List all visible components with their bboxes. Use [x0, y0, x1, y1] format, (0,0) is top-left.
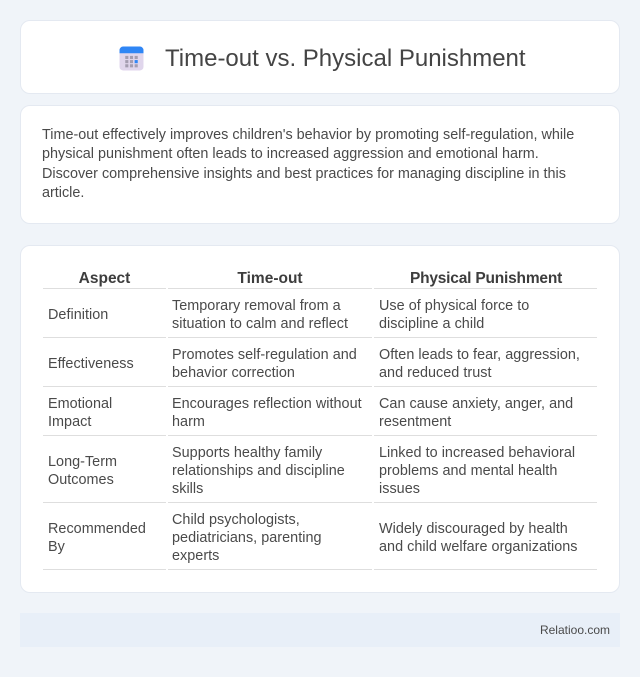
- intro text: Discover comprehensive insights and best practices for managing discipline in this: [42, 166, 566, 182]
- Time-out emotional impact: Encourages reflection without: [172, 396, 362, 412]
- Time-out effectiveness: Promotes self-regulation and: [172, 347, 357, 363]
- Time-out recommended by: [172, 512, 322, 564]
- row: Emotional Impact: [48, 396, 112, 430]
- intro panel: [20, 105, 620, 224]
- Physical Punishment definition: discipline a child: [379, 316, 484, 332]
- icon: calendar: [120, 46, 144, 70]
- intro text: physical punishment often leads to increased aggression and emotional harm.: [42, 146, 539, 162]
- intro text: [42, 127, 574, 201]
- title: Time-out vs. Physical Punishment: [165, 45, 526, 72]
- Time-out long-term outcomes: [172, 445, 345, 497]
- Physical Punishment emotional impact: [379, 396, 573, 430]
- Time-out effectiveness: behavior correction: [172, 365, 295, 381]
- Physical Punishment recommended by: and child welfare organizations: [379, 539, 578, 555]
- footer brand: Relatioo.com: [540, 623, 610, 637]
- row: Emotional Impact: Emotional: [48, 396, 112, 412]
- Time-out effectiveness: [172, 347, 357, 381]
- table panel: [20, 245, 620, 593]
- Time-out definition: situation to calm and reflect: [172, 316, 348, 332]
- Time-out long-term outcomes: skills: [172, 481, 203, 497]
- row: Long-Term Outcomes: Outcomes: [48, 472, 114, 488]
- Physical Punishment long-term outcomes: [379, 445, 575, 497]
- Physical Punishment definition: [379, 298, 529, 332]
- row: Long-Term Outcomes: [48, 454, 117, 488]
- Physical Punishment recommended by: [379, 521, 578, 555]
- Physical Punishment recommended by: Widely discouraged by health: [379, 521, 568, 537]
- Physical Punishment definition: Use of physical force to: [379, 298, 529, 314]
- row: Definition: Definition: [48, 307, 108, 323]
- table header: Time-out: Time-out: [237, 270, 303, 287]
- Time-out definition: [172, 298, 348, 332]
- Physical Punishment long-term outcomes: issues: [379, 481, 420, 497]
- header panel: [20, 20, 620, 94]
- Time-out emotional impact: [172, 396, 362, 430]
- row: Recommended By: Recommended: [48, 521, 146, 537]
- Time-out recommended by: experts: [172, 548, 219, 564]
- table header: Physical Punishment: Physical Punishment: [410, 270, 562, 287]
- row: Long-Term Outcomes: Long-Term: [48, 454, 117, 470]
- Physical Punishment effectiveness: Often leads to fear, aggression,: [379, 347, 580, 363]
- row: Emotional Impact: Impact: [48, 414, 91, 430]
- footer bar: [20, 613, 620, 647]
- Time-out long-term outcomes: relationships and discipline: [172, 463, 345, 479]
- Physical Punishment effectiveness: and reduced trust: [379, 365, 492, 381]
- row: Effectiveness: Effectiveness: [48, 356, 134, 372]
- row: Recommended By: By: [48, 539, 65, 555]
- row: Recommended By: [48, 521, 146, 555]
- Physical Punishment long-term outcomes: Linked to increased behavioral: [379, 445, 575, 461]
- Time-out emotional impact: harm: [172, 414, 205, 430]
- Physical Punishment emotional impact: Can cause anxiety, anger, and: [379, 396, 573, 412]
- Time-out long-term outcomes: Supports healthy family: [172, 445, 322, 461]
- Time-out definition: Temporary removal from a: [172, 298, 341, 314]
- Time-out recommended by: pediatricians, parenting: [172, 530, 322, 546]
- table header: Aspect: Aspect: [79, 270, 130, 287]
- intro text: article.: [42, 185, 84, 201]
- intro text: Time-out effectively improves children's behavior by promoting self-regulation, while: [42, 127, 574, 143]
- Physical Punishment long-term outcomes: problems and mental health: [379, 463, 557, 479]
- Physical Punishment emotional impact: resentment: [379, 414, 451, 430]
- Time-out recommended by: Child psychologists,: [172, 512, 300, 528]
- Physical Punishment effectiveness: [379, 347, 580, 381]
